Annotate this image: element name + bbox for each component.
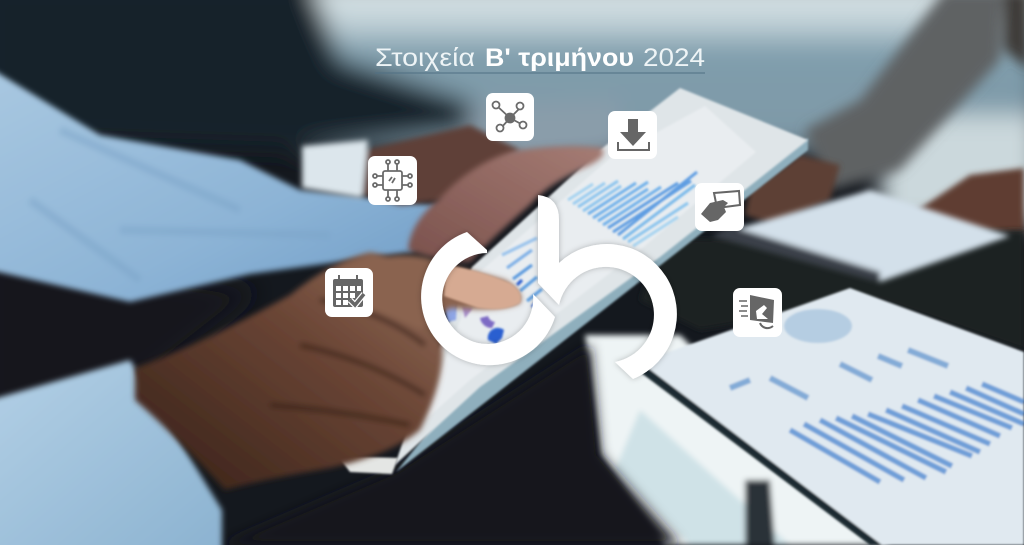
tablet	[395, 88, 808, 472]
icon: calendar check	[325, 268, 373, 317]
title underline	[375, 72, 705, 74]
grey sleeve, right person	[805, 0, 1024, 190]
logo: cb mark	[421, 195, 677, 379]
tablet chart lower	[443, 238, 542, 344]
dark area under tablet	[220, 345, 680, 545]
glossy table centre	[585, 335, 890, 545]
title: 2024	[643, 44, 705, 72]
right hands	[745, 155, 1024, 233]
lower right paper with charts	[632, 288, 1024, 545]
blue shirt sleeve	[0, 68, 438, 302]
title: Στοιχεία	[375, 44, 475, 72]
dark table right side	[640, 230, 1024, 350]
pointing finger	[444, 265, 521, 309]
icon: hand holding card	[695, 183, 744, 231]
tablet chart upper	[568, 172, 697, 246]
title: Β' τριμήνου	[485, 44, 634, 72]
upper right paper	[712, 190, 1010, 282]
lower hand pointing at tablet	[135, 252, 521, 490]
bottom-left shirt cuff	[0, 360, 222, 545]
icon: download	[608, 111, 657, 159]
icon: presentation screen	[733, 288, 782, 337]
blurred office backdrop	[0, 0, 1024, 420]
title	[375, 44, 705, 72]
icon: network nodes	[486, 93, 534, 141]
icon: chip	[368, 156, 417, 205]
upper hand on tablet	[408, 146, 604, 262]
white keyboard edge	[338, 456, 398, 474]
white shirt cuff	[302, 125, 520, 205]
